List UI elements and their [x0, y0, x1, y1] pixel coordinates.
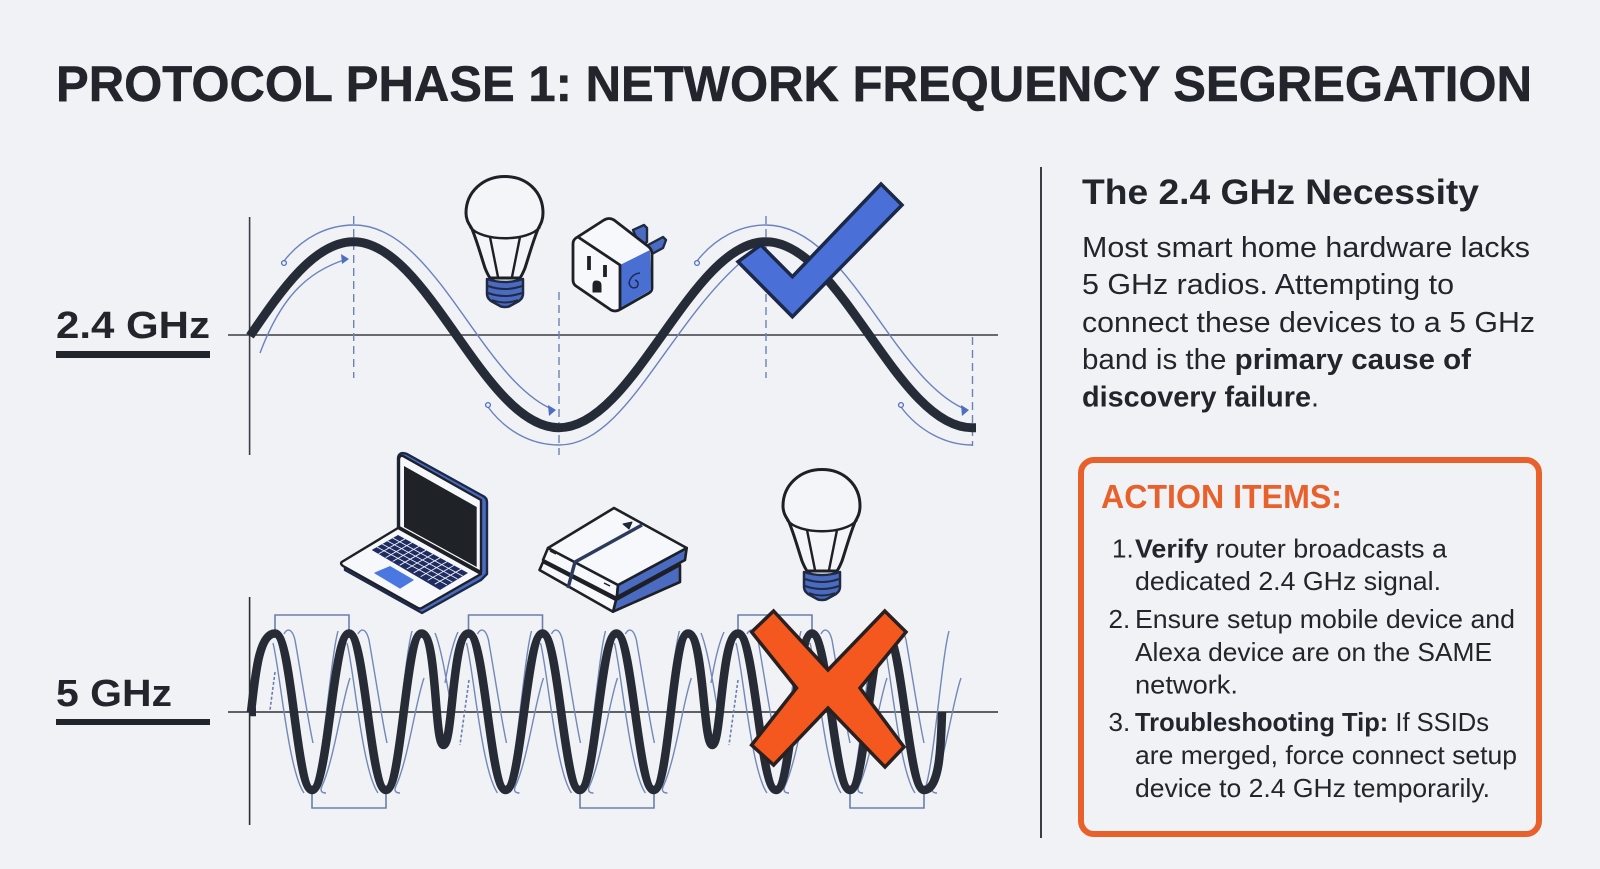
text block: the 2.4 GHz necessity: The 2.4 GHz Necessity [1082, 173, 1480, 212]
label: 2.4 GHz: 2.4 GHz [56, 305, 210, 347]
panel: action items: ACTION ITEMS: [1101, 478, 1342, 515]
icon: light bulb (2.4 GHz) [466, 176, 543, 307]
chart: 2.4 GHz wave [228, 216, 998, 455]
text block: the 2.4 GHz necessity: connect these devices to a 5 GHz [1082, 307, 1535, 339]
icon: orange X mark [752, 611, 906, 767]
panel: action items: Alexa device are on the SAME [1135, 637, 1492, 667]
panel divider [1040, 167, 1042, 838]
panel: action items: 1. [1112, 534, 1134, 564]
panel: action items: device to 2.4 GHz temporarily. [1135, 773, 1490, 803]
panel: action items: 2. [1108, 604, 1130, 634]
text block: the 2.4 GHz necessity: discovery failure. [1082, 382, 1319, 414]
panel: action items: 3. [1108, 707, 1130, 737]
panel: action items: Ensure setup mobile device and [1135, 604, 1515, 634]
icon: blue check mark [738, 184, 902, 317]
label: 5 GHz: 5 GHz [56, 673, 172, 715]
icon: light bulb (5 GHz) [783, 470, 860, 600]
title: PROTOCOL PHASE 1: NETWORK FREQUENCY SEGREGATION [56, 56, 1532, 112]
chart: 5 GHz wave [228, 597, 998, 825]
text block: the 2.4 GHz necessity: band is the primary cause of [1082, 344, 1471, 376]
icon: smart plug [573, 218, 666, 311]
panel: action items: dedicated 2.4 GHz signal. [1135, 566, 1441, 596]
icon: router [540, 508, 687, 612]
panel: action items: are merged, force connect setup [1135, 740, 1517, 770]
panel: action items [1081, 460, 1539, 834]
text block: the 2.4 GHz necessity [1082, 173, 1535, 414]
label: 5 GHz [56, 673, 210, 725]
panel: action items: Verify router broadcasts a [1135, 534, 1448, 564]
panel: action items: Troubleshooting Tip: If SSIDs [1135, 707, 1489, 737]
icon: laptop [341, 453, 487, 613]
text block: the 2.4 GHz necessity: Most smart home hardware lacks [1082, 232, 1530, 264]
panel: action items: network. [1135, 670, 1238, 700]
text block: the 2.4 GHz necessity: 5 GHz radios. Attempting to [1082, 269, 1454, 301]
